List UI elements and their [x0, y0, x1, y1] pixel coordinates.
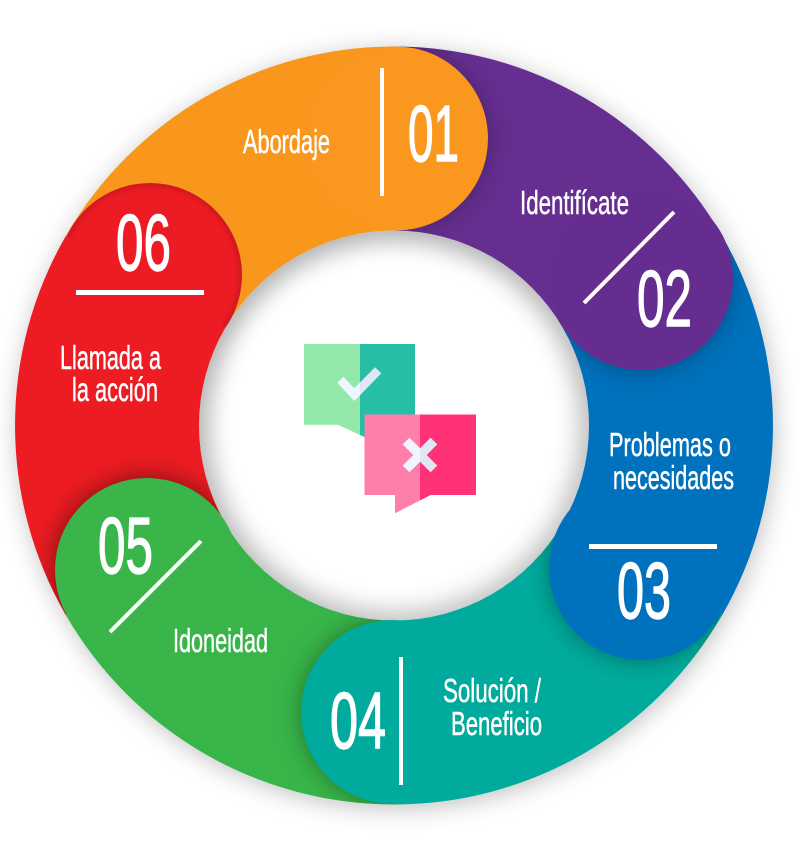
sector: teal	[394, 523, 722, 804]
step 06: Llamada a la acción	[58, 183, 242, 408]
label Solución / Beneficio	[443, 672, 542, 742]
label Problemas o necesidades: necesidades	[613, 459, 734, 496]
label Llamada a la acción	[60, 339, 161, 408]
sector: green	[66, 523, 394, 804]
step 02: Identifícate	[520, 184, 733, 370]
label Problemas o necesidades: Problemas o	[609, 426, 731, 463]
divider 06	[76, 290, 204, 295]
icon: pink bubble with cross	[364, 414, 476, 513]
sector: purple	[394, 46, 722, 328]
icon: green bubble with check	[304, 344, 415, 437]
label Solución / Beneficio: Beneficio	[451, 705, 542, 742]
number 05: 05	[98, 501, 153, 590]
divider 04	[399, 657, 403, 785]
divider 05	[110, 541, 201, 632]
number 02: 02	[637, 254, 692, 343]
label Problemas o necesidades	[609, 426, 734, 496]
cap shadows on the following sector	[55, 48, 731, 802]
label Identifícate: Identifícate	[520, 184, 629, 221]
sector: orange	[66, 46, 394, 328]
number 06: 06	[116, 198, 171, 287]
number 01: 01	[408, 89, 459, 178]
step 03: Problemas o necesidades	[549, 426, 734, 660]
hole inner shadow	[199, 230, 589, 620]
divider 03	[589, 544, 717, 549]
label Idoneidad: Idoneidad	[173, 622, 268, 659]
label Llamada a la acción: Llamada a	[60, 339, 161, 376]
label Llamada a la acción: la acción	[72, 371, 158, 408]
sector: red	[15, 236, 225, 615]
label Abordaje: Abordaje	[243, 123, 330, 160]
step 04: Solución / Beneficio	[301, 620, 542, 804]
icon: speech bubbles with check and cross	[304, 344, 476, 513]
divider 01	[380, 68, 384, 196]
number 03: 03	[617, 546, 671, 635]
sector: blue	[563, 236, 773, 615]
step 01: Abordaje	[243, 46, 488, 230]
step 05: Idoneidad	[55, 478, 268, 662]
label Solución / Beneficio: Solución /	[443, 672, 542, 709]
number 04: 04	[330, 676, 386, 765]
divider 02	[584, 212, 674, 303]
